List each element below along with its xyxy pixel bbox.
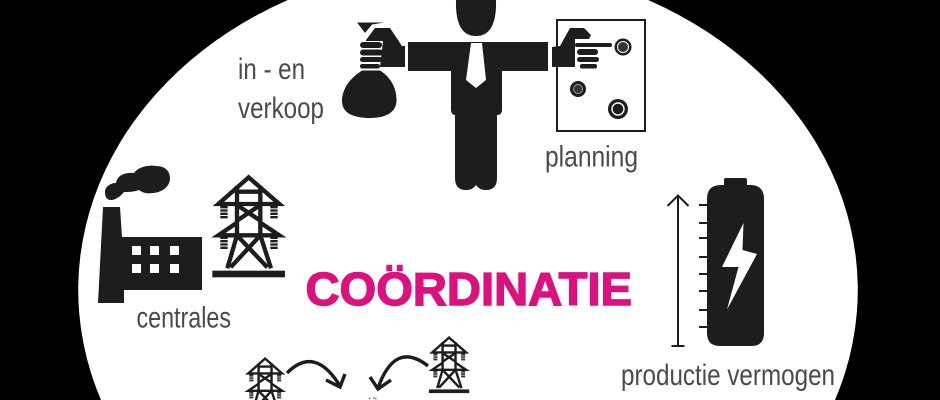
label: in- en verkoop: in - en (238, 53, 305, 86)
icon: pylon small left (245, 359, 285, 400)
label: productie vermogen: productie vermogen (621, 359, 835, 392)
label: in- en verkoop (238, 53, 324, 125)
title: COÖRDINATIE (306, 263, 632, 315)
label: centrales: centrales (136, 302, 231, 334)
clipped text marks (369, 397, 376, 400)
icon: pylon small right (429, 338, 469, 393)
icon: planning board with pointing hand (552, 20, 645, 131)
icon: pylon large (212, 177, 285, 277)
label: planning: planning (545, 140, 638, 174)
label: in- en verkoop: verkoop (238, 92, 324, 125)
icon: battery (699, 178, 764, 346)
icon: money bag in hand (342, 22, 405, 118)
icon: power plant (98, 166, 202, 303)
icon: production arrow (668, 196, 688, 346)
arrow: right curved (370, 357, 428, 389)
arrow: left curved (287, 362, 345, 387)
icon: businessman (408, 0, 548, 190)
